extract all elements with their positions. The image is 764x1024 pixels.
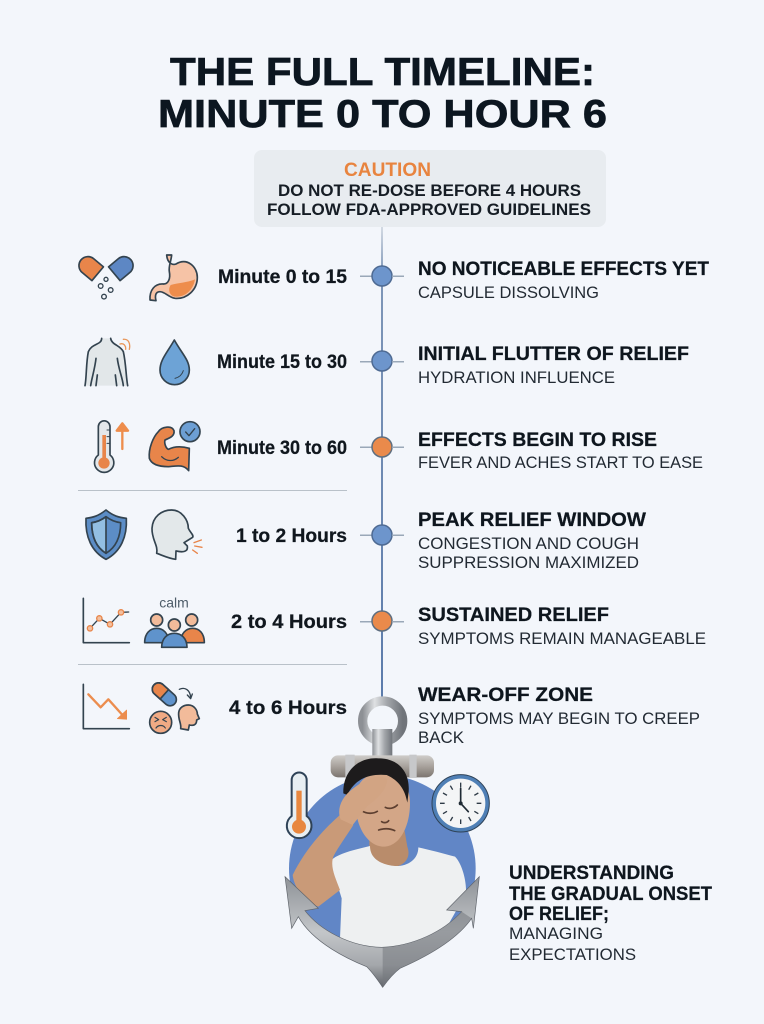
callout: caution: CAUTION [344, 160, 431, 181]
step: 1 to 2 hours: PEAK RELIEF WINDOW [418, 510, 646, 531]
caption: OF RELIEF; [509, 904, 609, 925]
eyes, nose and mouth [362, 805, 397, 831]
callout: caution: FOLLOW FDA-APPROVED GUIDELINES [267, 201, 591, 219]
step: 2 to 4 hours: SUSTAINED RELIEF [418, 605, 609, 626]
icon: calm group: calm [159, 595, 189, 611]
icon: thermometer rising [94, 421, 128, 472]
icon: falling chart [83, 684, 129, 729]
timeline spine [381, 227, 383, 705]
caption: THE GRADUAL ONSET [509, 884, 712, 905]
step: minute 15 to 30: HYDRATION INFLUENCE [418, 368, 615, 387]
step: 4 to 6 hours [229, 685, 700, 747]
callout: caution: DO NOT RE-DOSE BEFORE 4 HOURS [278, 182, 581, 200]
step: minute 15 to 30: Minute 15 to 30 [217, 352, 347, 373]
step: minute 30 to 60: FEVER AND ACHES START TO EASE [418, 453, 703, 472]
step: minute 0 to 15: CAPSULE DISSOLVING [418, 283, 599, 302]
shirt [331, 846, 466, 953]
icon: coughing head [152, 510, 202, 559]
icon: flexed muscle with check [149, 422, 200, 471]
step: minute 15 to 30 [217, 344, 689, 387]
man [293, 758, 466, 953]
step: 1 to 2 hours [236, 510, 646, 572]
icon: rising chart [83, 598, 129, 643]
step: minute 30 to 60: EFFECTS BEGIN TO RISE [418, 430, 657, 451]
step: 4 to 6 hours: WEAR-OFF ZONE [418, 685, 593, 706]
anchor shank [372, 729, 392, 756]
icon: wearing-off pill and faces [150, 680, 199, 733]
icon: capsule [75, 253, 137, 299]
icons row 1 to 3 [75, 253, 200, 472]
anchor ring [363, 701, 403, 741]
step: 4 to 6 hours: SYMPTOMS MAY BEGIN TO CREEP [418, 709, 700, 728]
step: minute 30 to 60: Minute 30 to 60 [217, 438, 347, 459]
step: 2 to 4 hours: SYMPTOMS REMAIN MANAGEABLE [418, 629, 706, 648]
step: minute 15 to 30: INITIAL FLUTTER OF RELIEF [418, 344, 689, 365]
hand [339, 777, 387, 825]
caption: MANAGING [509, 924, 603, 943]
caption: EXPECTATIONS [509, 945, 636, 964]
caption: UNDERSTANDING [509, 863, 674, 884]
step: 1 to 2 hours: CONGESTION AND COUGH [418, 534, 639, 553]
icon: stomach [150, 255, 197, 301]
icon: body with shoulder ache [85, 338, 130, 386]
step: 4 to 6 hours: 4 to 6 Hours [229, 698, 347, 719]
step: minute 0 to 15: Minute 0 to 15 [218, 267, 347, 288]
step: minute 0 to 15: NO NOTICEABLE EFFECTS YET [418, 259, 709, 280]
step: minute 30 to 60 [217, 430, 703, 472]
caption [509, 863, 712, 964]
neck [369, 823, 409, 867]
title: THE FULL TIMELINE: [170, 51, 595, 94]
hair [343, 758, 409, 803]
step: 1 to 2 hours: SUPPRESSION MAXIMIZED [418, 553, 639, 572]
step: 2 to 4 hours [231, 605, 706, 648]
icon: shield [86, 510, 126, 559]
face [356, 773, 410, 847]
title: MINUTE 0 TO HOUR 6 [158, 93, 607, 136]
title [158, 51, 607, 136]
step: minute 0 to 15 [218, 259, 709, 302]
icon: calm group [145, 595, 204, 647]
step: 2 to 4 hours: 2 to 4 Hours [231, 612, 347, 633]
icon: water drop [160, 340, 189, 385]
icon: thermometer [287, 773, 311, 838]
divider [78, 490, 347, 491]
illustration: anchor with unwell man [285, 701, 489, 987]
step: 4 to 6 hours: BACK [418, 728, 465, 747]
anchor flukes [285, 877, 479, 987]
icon: clock [432, 775, 489, 832]
divider [78, 664, 347, 665]
arm [293, 815, 353, 907]
blue circle backdrop [289, 775, 476, 962]
callout: caution [254, 150, 606, 227]
anchor stock [331, 755, 434, 778]
step: 1 to 2 hours: 1 to 2 Hours [236, 526, 347, 547]
icons row 4 to 6 [83, 510, 204, 733]
